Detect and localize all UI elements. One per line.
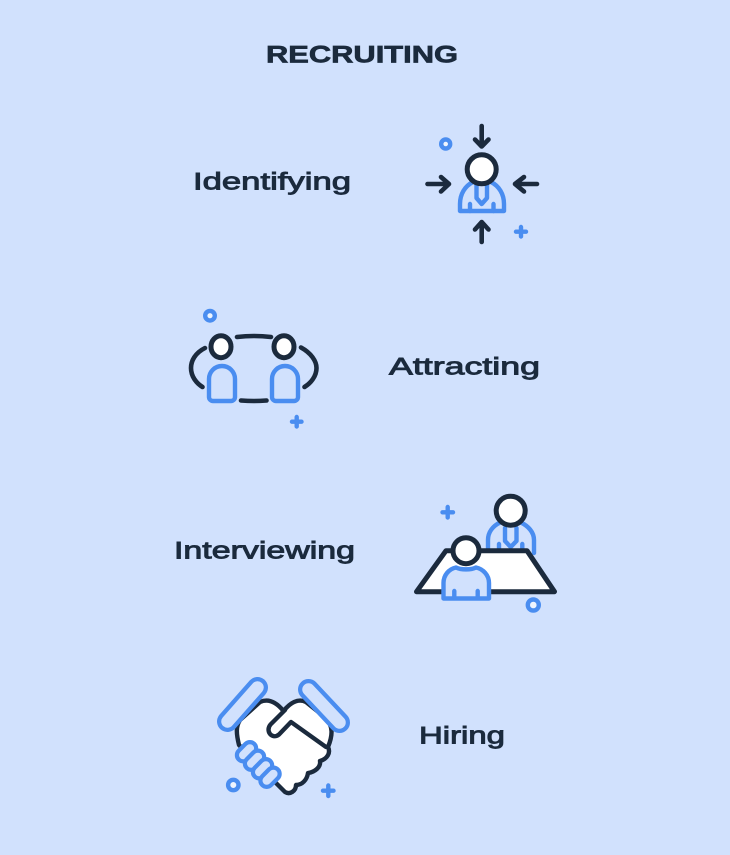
label: Identifying: Identifying	[193, 168, 351, 196]
label: Interviewing: Interviewing	[174, 538, 355, 564]
icon: person with arrows pointing inward	[428, 126, 537, 242]
left cuff	[228, 688, 258, 722]
fingers	[234, 740, 282, 789]
icon: two people in a circle	[191, 311, 316, 426]
right cuff	[308, 690, 340, 722]
label: Attracting: Attracting	[389, 354, 540, 380]
label: Hiring: Hiring	[419, 722, 505, 750]
icon: interview across a table	[416, 496, 554, 610]
icon: handshake	[228, 688, 340, 796]
title: RECRUITING	[266, 42, 458, 68]
